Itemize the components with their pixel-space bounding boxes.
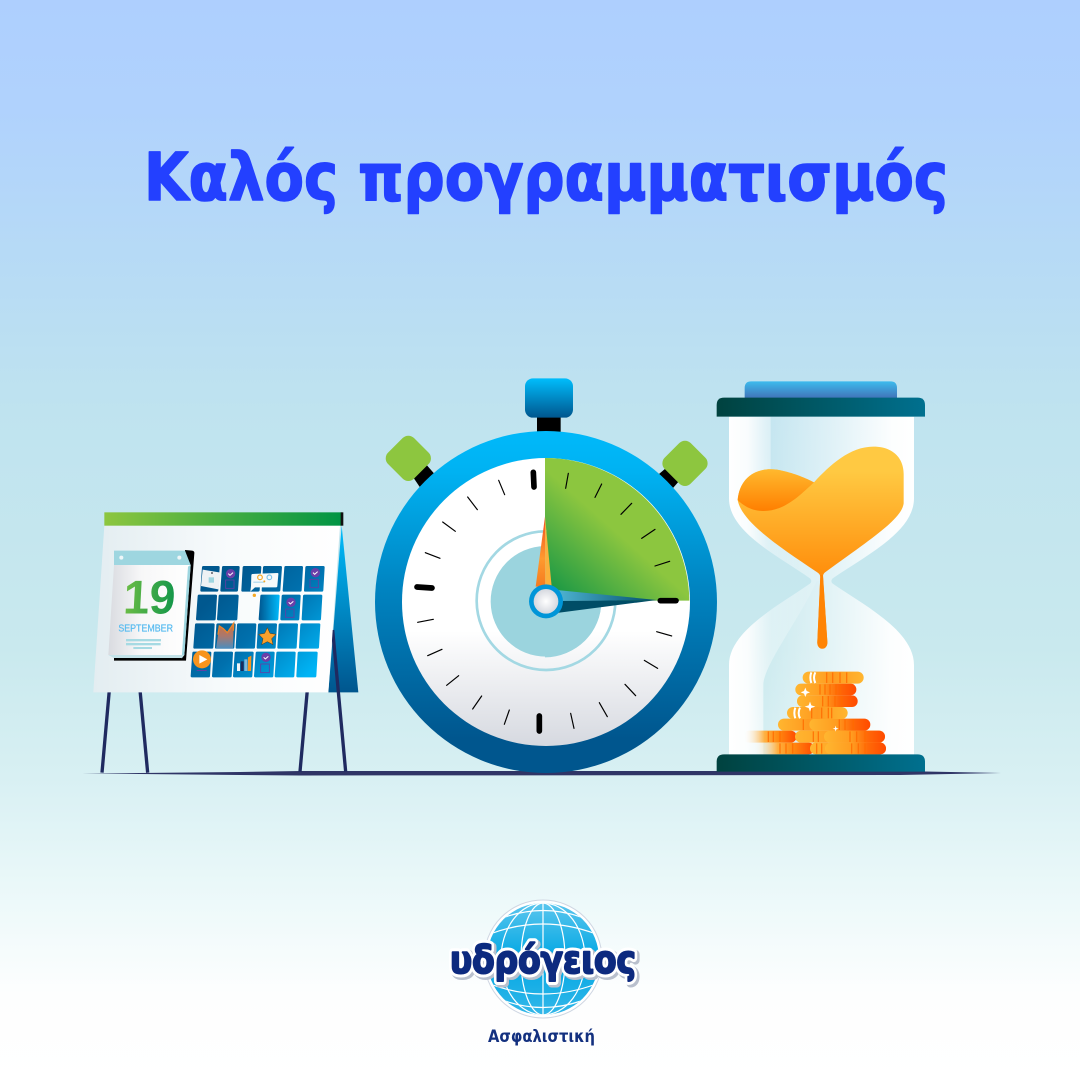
logo <box>450 900 638 1046</box>
upper sand <box>738 447 904 649</box>
calendar day tiles <box>192 567 323 676</box>
logo: υδρόγειος <box>450 938 636 982</box>
tear-off date calendar: SEPTEMBER <box>118 624 173 635</box>
icon: sticky note <box>201 570 221 589</box>
floor line <box>82 771 1001 776</box>
tear-off date calendar <box>108 550 194 661</box>
board sheet <box>93 526 340 692</box>
highlighted tile <box>260 596 278 619</box>
board legs <box>102 630 346 773</box>
wordmark: υδρόγειος <box>452 940 638 984</box>
icon: speech bubble <box>250 573 278 597</box>
icon: star <box>259 628 276 645</box>
tear-off date calendar: 19 <box>122 572 177 625</box>
icon: line chart <box>216 623 234 649</box>
top bar <box>717 398 925 417</box>
coin pile <box>743 672 886 754</box>
icon: play button <box>193 650 211 671</box>
right side button <box>659 437 711 489</box>
blue second hand <box>557 590 657 613</box>
globe <box>484 900 602 1018</box>
stopwatch case <box>375 431 717 773</box>
center hub <box>529 584 563 618</box>
icon: checklist items <box>226 568 320 673</box>
illustration: stopwatch <box>375 378 717 773</box>
tagline: Ασφαλιστική <box>488 1027 595 1046</box>
bottom bar <box>717 754 925 772</box>
title: Καλός προγραμματισμός <box>144 139 948 216</box>
left side button <box>382 432 434 487</box>
glass body <box>729 417 914 755</box>
logo: υδρόγειος <box>450 938 636 982</box>
icon: bar chart <box>237 656 251 671</box>
green time sector <box>545 458 689 601</box>
tick marks <box>417 472 676 731</box>
illustration: planning board calendar <box>93 512 358 773</box>
inner dial <box>477 531 615 670</box>
top crown button <box>525 378 573 435</box>
orange minute hand <box>536 517 552 587</box>
illustration: hourglass <box>717 381 925 772</box>
board green header <box>104 512 342 526</box>
clock face <box>402 458 690 746</box>
top cap <box>745 381 897 399</box>
board back support <box>328 526 358 692</box>
